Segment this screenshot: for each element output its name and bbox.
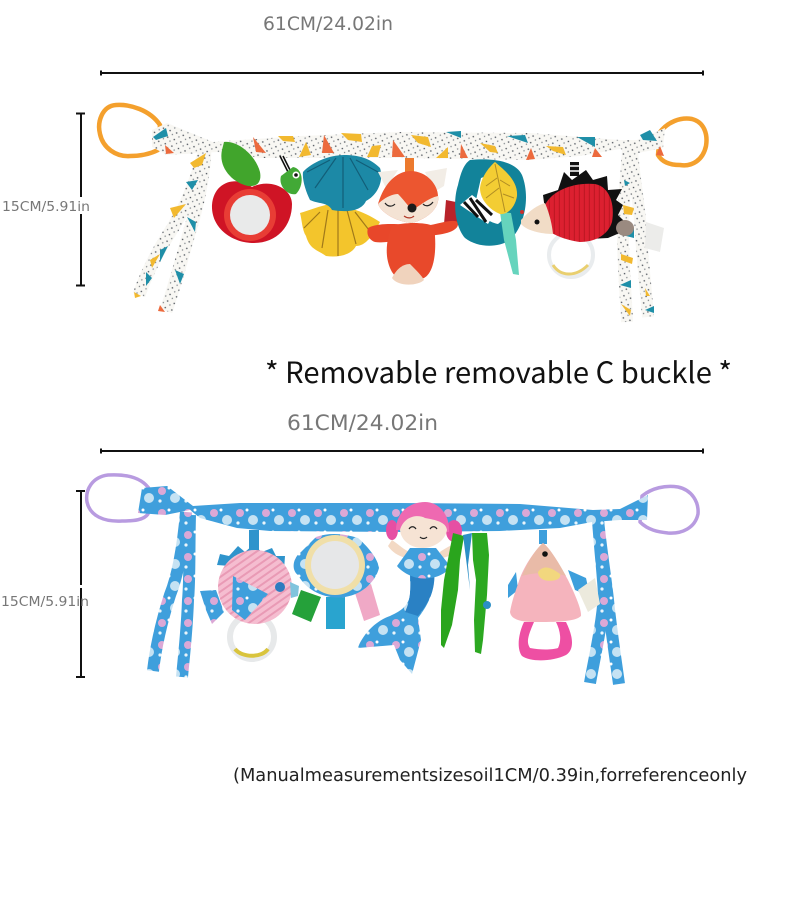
fish eye bbox=[275, 582, 285, 592]
rattle ring bbox=[230, 615, 274, 659]
fish spiny fin bbox=[217, 545, 285, 570]
toy: seaweed bbox=[441, 533, 491, 654]
toy: fish mirror bbox=[292, 534, 380, 629]
bird head bbox=[522, 543, 566, 576]
label tag bbox=[645, 222, 664, 252]
bird hanging tab bbox=[539, 530, 547, 544]
yellow leaf bbox=[480, 162, 517, 214]
toy: yellow shell bbox=[300, 204, 380, 257]
mermaid face bbox=[400, 516, 447, 548]
left tail print shapes bbox=[134, 153, 206, 312]
dimension: top height line bbox=[76, 113, 85, 286]
toy: teal shell bbox=[303, 155, 381, 211]
right tails bbox=[590, 520, 619, 684]
fish hanging tab bbox=[249, 530, 259, 552]
bird eye bbox=[542, 551, 548, 557]
fox arms bbox=[367, 221, 458, 242]
heading: bottom width measurement: 61CM/24.02in bbox=[287, 411, 438, 435]
toy: mermaid bbox=[358, 502, 462, 674]
spines bbox=[543, 170, 625, 240]
toy: hedgehog bbox=[520, 162, 634, 277]
dimension: bottom width line bbox=[101, 448, 703, 454]
mermaid dress bbox=[397, 548, 450, 578]
toy: fish rattle bbox=[200, 530, 299, 659]
icon: left lilac ring bbox=[87, 475, 150, 521]
toy strap two bbox=[87, 475, 698, 684]
dimension: top width line bbox=[101, 70, 703, 76]
mermaid hair buns bbox=[386, 520, 398, 540]
left tails bbox=[139, 150, 205, 311]
toy strap one bbox=[99, 105, 706, 322]
striped tag bbox=[460, 195, 495, 224]
bird body bbox=[510, 543, 581, 622]
fish body bbox=[218, 550, 292, 624]
bird wings bbox=[508, 572, 518, 598]
dimension: bottom height line bbox=[76, 491, 85, 677]
fabric strap bbox=[138, 486, 648, 532]
tagline: removable buckle: * Removable removable C buckle * bbox=[265, 350, 732, 392]
mermaid arms bbox=[388, 540, 410, 558]
fox hanging tab bbox=[405, 158, 414, 172]
fish side fin bbox=[232, 576, 268, 620]
toy: pink bird bbox=[508, 530, 600, 660]
mirror body bbox=[294, 534, 379, 598]
mint ribbon bbox=[500, 212, 519, 275]
label: top height measurement: 15CM/5.91in bbox=[2, 199, 90, 215]
fox dark tail hint bbox=[444, 200, 458, 224]
fox ears bbox=[378, 170, 398, 188]
fox feet bbox=[392, 264, 424, 285]
mermaid hair bbox=[396, 502, 449, 532]
red body bbox=[545, 184, 613, 242]
bird tag bbox=[578, 578, 600, 612]
fox body bbox=[387, 223, 435, 280]
caterpillar bbox=[280, 156, 302, 194]
face bbox=[521, 203, 553, 234]
rattle ring bbox=[549, 233, 593, 277]
ring opening bbox=[476, 176, 510, 224]
strap print shapes bbox=[153, 128, 664, 160]
toy: fox bbox=[367, 158, 458, 285]
right tails bbox=[623, 150, 648, 322]
mermaid tail bbox=[358, 570, 434, 674]
right tail print shapes bbox=[620, 180, 654, 316]
label: bottom height measurement: 15CM/5.91in bbox=[1, 594, 89, 610]
teether bbox=[519, 622, 572, 660]
toy: teal ring with leaf bbox=[455, 159, 526, 275]
grey tail fur bbox=[616, 220, 634, 236]
icon: left orange ring bbox=[99, 105, 160, 156]
fabric strap bbox=[152, 123, 665, 160]
toy: apple with mirror bbox=[212, 142, 302, 243]
left tails bbox=[153, 512, 190, 677]
bird beak bbox=[538, 568, 560, 581]
fox head bbox=[378, 171, 438, 223]
fish tail bbox=[200, 590, 224, 624]
fish mouth fin bbox=[290, 582, 299, 598]
heading: top width measurement: 61CM/24.02in bbox=[263, 14, 393, 35]
ribbons bbox=[292, 584, 380, 629]
footnote: measurement disclaimer: (Manualmeasurementsizesoil1CM/0.39in,forreferenceonly bbox=[233, 766, 747, 786]
green leaf bbox=[221, 142, 260, 186]
striped tab bbox=[570, 162, 579, 176]
icon: right orange ring bbox=[658, 119, 706, 165]
icon: right lilac ring bbox=[640, 486, 698, 533]
